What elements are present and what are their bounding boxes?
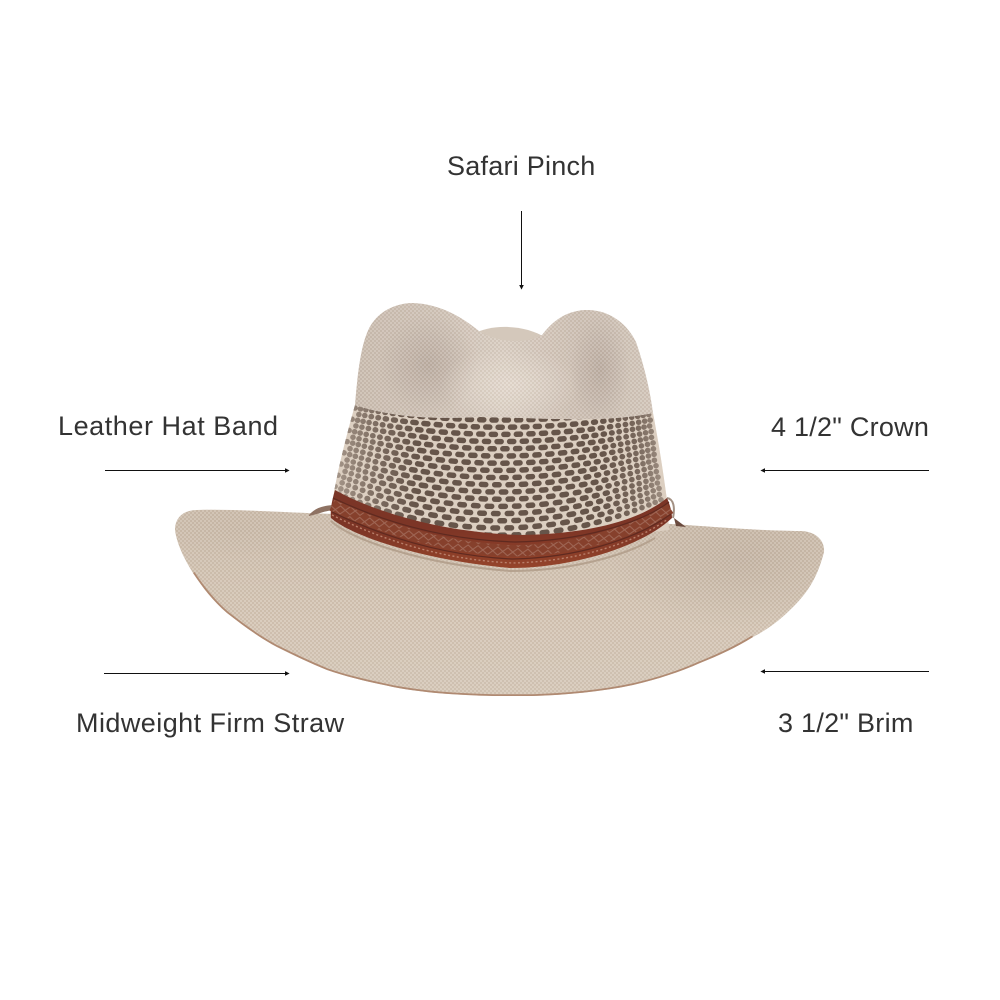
label: Midweight Firm Straw: Midweight Firm Straw: [76, 708, 345, 738]
label: Leather Hat Band: Leather Hat Band: [58, 411, 279, 441]
ventilated crown mesh: [332, 405, 669, 535]
arrow: 3 1/2" Brim: [762, 670, 929, 673]
label: Leather Hat Band: [58, 411, 288, 472]
label: 3 1/2" Brim: [762, 670, 929, 738]
hat brim: [175, 510, 824, 696]
arrow: Safari Pinch: [520, 211, 523, 288]
crown with safari pinch: [355, 303, 653, 420]
arrow: Leather Hat Band: [105, 469, 288, 472]
label: Safari Pinch: [447, 151, 596, 288]
arrow: Midweight Firm Straw: [104, 672, 288, 675]
label: 3 1/2" Brim: 3 1/2" Brim: [778, 708, 914, 738]
label: 4 1/2" Crown: 4 1/2" Crown: [771, 412, 929, 442]
arrow: 4 1/2" Crown: [762, 469, 929, 472]
leather hat band: [309, 490, 686, 571]
hat illustration: [175, 303, 824, 696]
label: Safari Pinch: Safari Pinch: [447, 151, 596, 181]
label: 4 1/2" Crown: [762, 412, 929, 472]
label: Midweight Firm Straw: [76, 672, 345, 738]
